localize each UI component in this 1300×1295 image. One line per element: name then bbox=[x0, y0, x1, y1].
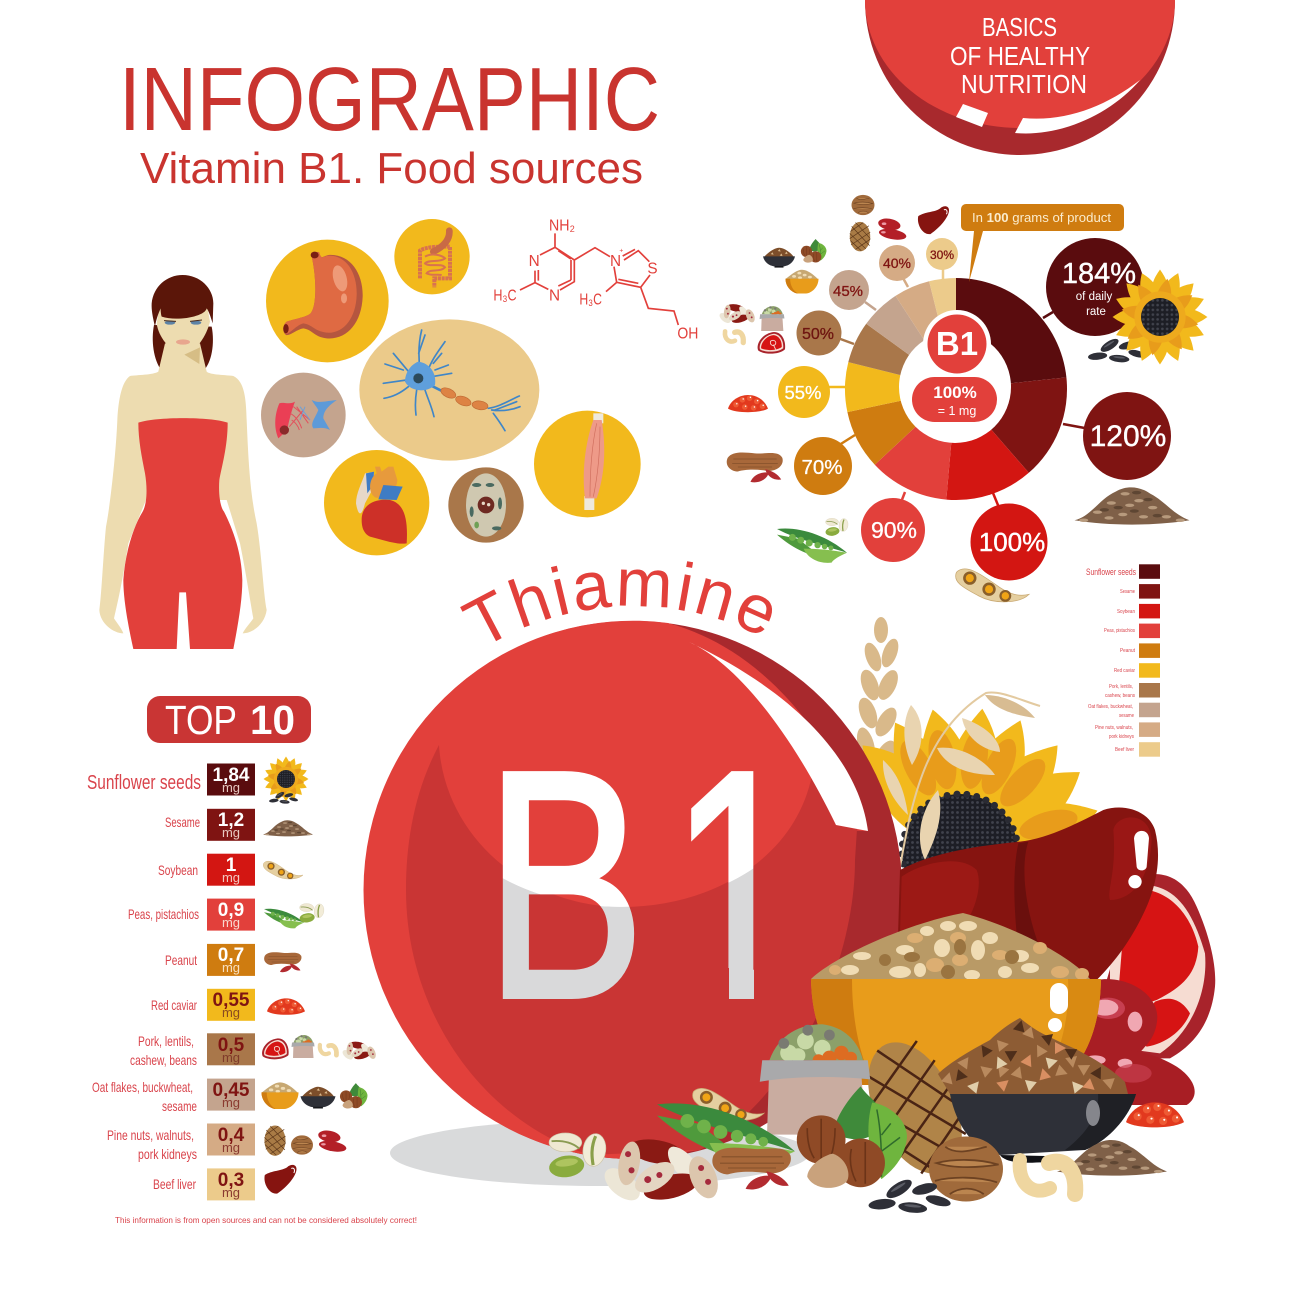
top 10 row: soybean bbox=[158, 854, 303, 886]
top 10 row: red caviar bbox=[151, 989, 305, 1021]
top 10 row: peas, pistachios bbox=[128, 899, 325, 931]
pie bubble: 70%: 70% bbox=[801, 456, 843, 479]
pie bubble: 90% bbox=[861, 498, 925, 562]
big food: kidneys bbox=[1083, 979, 1195, 1105]
legend: Pork, lentils, bbox=[1109, 684, 1133, 690]
top 10 row: pine nuts, walnuts, pork kidneys: mg bbox=[222, 1140, 240, 1155]
icon: pine cone bbox=[850, 222, 870, 251]
big food: liver bbox=[897, 807, 1158, 980]
chemical structure: NH₂ bbox=[549, 218, 575, 235]
legend: sesame bbox=[1119, 713, 1134, 719]
heading: thiamine: Thiamine bbox=[460, 561, 772, 642]
pie bubble: 55%: 55% bbox=[784, 382, 822, 403]
top 10 badge: TOP bbox=[165, 697, 237, 743]
top 10 row: peas, pistachios: Peas, pistachios bbox=[128, 906, 199, 922]
pie bubble: 40%: 40% bbox=[883, 255, 911, 271]
icon: neuron bbox=[359, 319, 539, 461]
pie bubble: 184%: of daily bbox=[1076, 291, 1112, 303]
chemical structure: H₃C bbox=[493, 288, 517, 305]
top 10 row: sesame: Sesame bbox=[165, 814, 200, 830]
top 10 row: peanut: Peanut bbox=[165, 952, 197, 968]
chart: thiamine donut bbox=[828, 268, 1090, 510]
pie bubble: 120%: 120% bbox=[1090, 420, 1166, 453]
icon: kidney bbox=[877, 217, 907, 242]
disclaimer: This information is from open sources and can not be considered absolutely correct! bbox=[115, 1215, 417, 1225]
chemical structure: H₃C bbox=[579, 292, 602, 309]
pie bubble: 50% bbox=[796, 310, 842, 356]
icon: hazelnut bbox=[801, 239, 826, 263]
big food: walnut bbox=[929, 1136, 1003, 1202]
pie bubble: 100%: 100% bbox=[979, 527, 1045, 557]
pie bubble: 184%: rate bbox=[1086, 306, 1106, 318]
icon: beans bbox=[718, 303, 756, 325]
top 10 row: pork, lentils, cashew, beans: mg bbox=[222, 1050, 240, 1065]
badge: basics of healthy nutrition: BASICS bbox=[982, 12, 1057, 42]
chemical structure: N bbox=[529, 253, 540, 270]
chemical structure: + bbox=[619, 248, 623, 255]
chemical structure: N bbox=[549, 288, 560, 305]
top 10 row: sesame bbox=[165, 809, 313, 841]
icon: liver bbox=[918, 206, 949, 234]
icon: oat bowl bbox=[786, 270, 818, 294]
chemical structure: N bbox=[610, 253, 621, 270]
top 10 badge: 10 bbox=[250, 697, 295, 743]
big food: sesame pile bbox=[1057, 1140, 1167, 1176]
top 10 row: beef liver: 0,3 bbox=[218, 1170, 244, 1191]
big food: sunflower bbox=[844, 704, 1105, 910]
top 10 row: pine nuts, walnuts, pork kidneys: Pine nuts, walnuts, bbox=[107, 1127, 194, 1143]
icon: sesame pile bbox=[1074, 487, 1190, 525]
legend: Beef liver bbox=[1115, 747, 1134, 753]
top 10 row: oat flakes, buckwheat, sesame: Oat flakes, buckwheat, bbox=[92, 1079, 193, 1095]
top 10 row: peanut: mg bbox=[222, 960, 240, 975]
top 10 row: soybean: 1 bbox=[226, 855, 237, 876]
icon: sunflower bbox=[1112, 270, 1208, 364]
icon: cashew bbox=[725, 331, 743, 343]
big food: sunflower seeds bbox=[868, 1176, 952, 1214]
badge: basics of healthy nutrition bbox=[865, 0, 1175, 155]
pie bubble: 45% bbox=[829, 270, 869, 310]
pie bubble: 120% bbox=[1083, 392, 1171, 480]
big food: pistachio bbox=[548, 1132, 608, 1179]
icon: pistachio bbox=[825, 518, 849, 537]
top 10 row: beef liver bbox=[153, 1165, 296, 1200]
icon: stomach bbox=[266, 240, 389, 362]
icon: soybean pod bbox=[956, 569, 1029, 602]
legend bbox=[1086, 564, 1160, 757]
woman figure bbox=[99, 275, 267, 649]
top 10 row: pine nuts, walnuts, pork kidneys: 0,4 bbox=[218, 1125, 245, 1146]
pie bubble: 100% bbox=[970, 504, 1048, 580]
icon: sunflower seeds bbox=[1088, 336, 1147, 363]
icon: capillaries bbox=[261, 373, 346, 457]
top 10 row: pine nuts, walnuts, pork kidneys: pork kidneys bbox=[138, 1146, 197, 1162]
top 10 row: oat flakes, buckwheat, sesame: mg bbox=[222, 1095, 240, 1110]
legend: pork kidneys bbox=[1109, 734, 1134, 740]
badge: basics of healthy nutrition: OF HEALTHY bbox=[950, 41, 1090, 71]
top 10 row: sunflower seeds: Sunflower seeds bbox=[87, 772, 201, 794]
shadow under capsule bbox=[390, 1120, 810, 1186]
top 10 row: sesame: 1,2 bbox=[218, 810, 244, 831]
top 10 row: beef liver: mg bbox=[222, 1185, 240, 1200]
callout: in 100 grams of product bbox=[961, 204, 1124, 282]
big food: soybean pod bbox=[693, 1088, 764, 1120]
pie bubble: 40% bbox=[879, 245, 915, 281]
top 10 row: red caviar: Red caviar bbox=[151, 997, 197, 1013]
icon: intestine bbox=[394, 219, 470, 294]
icon: walnut bbox=[852, 195, 874, 215]
legend: Sesame bbox=[1120, 589, 1135, 595]
top 10 row: pork, lentils, cashew, beans: cashew, beans bbox=[130, 1052, 197, 1068]
big food: caviar bbox=[1126, 1102, 1184, 1127]
top 10 row: pine nuts, walnuts, pork kidneys bbox=[107, 1124, 347, 1162]
center label: B1: B1 bbox=[936, 325, 978, 362]
top 10 row: sunflower seeds: mg bbox=[222, 780, 240, 795]
big food: beans bbox=[599, 1136, 724, 1207]
pie bubble: 45%: 45% bbox=[833, 283, 863, 300]
big food: buckwheat bowl bbox=[938, 1018, 1136, 1163]
label: B1: B bbox=[485, 704, 645, 1066]
heading: thiamine bbox=[460, 561, 772, 642]
icon: peas bbox=[777, 528, 847, 563]
chemical structure bbox=[493, 218, 698, 342]
legend: Peanut bbox=[1120, 648, 1136, 654]
top 10 row: sunflower seeds bbox=[87, 756, 308, 804]
icon: peanut bbox=[727, 452, 783, 482]
big food: peas bbox=[657, 1103, 795, 1171]
center label: 100% = 1 mg bbox=[912, 377, 997, 422]
pie bubble: 50%: 50% bbox=[802, 326, 834, 343]
center label: B1 bbox=[928, 314, 986, 374]
label: B1 bbox=[502, 771, 754, 999]
top 10 row: oat flakes, buckwheat, sesame: sesame bbox=[162, 1098, 197, 1114]
icon: red caviar bbox=[728, 395, 768, 412]
top 10 row: soybean: Soybean bbox=[158, 862, 198, 878]
top 10 row: peanut bbox=[165, 944, 301, 976]
legend: Peas, pistachios bbox=[1104, 628, 1135, 634]
vitamin capsule bbox=[364, 621, 902, 1159]
icon: cell bbox=[448, 467, 524, 543]
top 10 row: red caviar: mg bbox=[222, 1005, 240, 1020]
pie bubble: 184% bbox=[1046, 238, 1144, 336]
center label: 100% = 1 mg: 100% bbox=[933, 383, 977, 402]
top 10 row: sunflower seeds: 1,84 bbox=[213, 765, 250, 786]
callout: in 100 grams of product: In 100 grams of product bbox=[972, 210, 1111, 225]
legend: Oat flakes, buckwheat, bbox=[1088, 704, 1133, 710]
big food: cashew bbox=[1020, 1160, 1075, 1194]
top 10 row: peanut: 0,7 bbox=[218, 945, 244, 966]
legend: Sunflower seeds bbox=[1086, 567, 1136, 577]
top 10 row: beef liver: Beef liver bbox=[153, 1176, 196, 1192]
organ icons bbox=[261, 218, 698, 555]
icon: heart bbox=[324, 450, 429, 555]
top 10 row: oat flakes, buckwheat, sesame bbox=[92, 1079, 368, 1114]
top 10 row: red caviar: 0,55 bbox=[213, 990, 250, 1011]
big food: pine cone bbox=[849, 1028, 981, 1188]
big food: oat sprig bbox=[883, 692, 1040, 867]
top 10 row: sesame: mg bbox=[222, 825, 240, 840]
icon: muscle bbox=[534, 411, 641, 517]
big food: wheat ear bbox=[854, 617, 902, 773]
top 10 badge bbox=[147, 696, 311, 743]
big food: pork bbox=[1083, 874, 1215, 1058]
pie bubble: 184%: 184% bbox=[1062, 258, 1136, 290]
pie bubble: 70% bbox=[794, 437, 852, 495]
chemical structure: S bbox=[647, 260, 658, 277]
big food: lentil sack bbox=[760, 1024, 870, 1135]
top 10 row: pork, lentils, cashew, beans: 0,5 bbox=[218, 1035, 245, 1056]
center label: 100% = 1 mg: = 1 mg bbox=[938, 404, 976, 418]
top 10 row: peas, pistachios: 0,9 bbox=[218, 900, 244, 921]
title: INFOGRAPHIC bbox=[119, 50, 660, 150]
chemical structure: OH bbox=[677, 325, 698, 342]
top 10 row: oat flakes, buckwheat, sesame: 0,45 bbox=[213, 1080, 250, 1101]
label: B1: 1 bbox=[670, 704, 803, 1066]
legend: Pine nuts, walnuts, bbox=[1095, 725, 1133, 731]
big food: oat bowl bbox=[811, 913, 1101, 1085]
top 10 row: soybean: mg bbox=[222, 870, 240, 885]
top 10 row: pork, lentils, cashew, beans: Pork, lentils, bbox=[138, 1033, 194, 1049]
subtitle: Vitamin B1. Food sources bbox=[140, 144, 643, 193]
badge: basics of healthy nutrition: NUTRITION bbox=[961, 69, 1087, 99]
pie bubble: 90%: 90% bbox=[871, 517, 917, 543]
pie bubble: 30%: 30% bbox=[930, 248, 954, 262]
icon: lentil sack bbox=[760, 306, 784, 331]
top 10 row: pork, lentils, cashew, beans bbox=[130, 1033, 377, 1068]
legend: Soybean bbox=[1117, 609, 1135, 615]
top 10 row: peas, pistachios: mg bbox=[222, 915, 240, 930]
legend: cashew, beans bbox=[1105, 693, 1135, 699]
pie bubble: 55% bbox=[778, 366, 830, 418]
legend: Red caviar bbox=[1114, 668, 1135, 674]
big food: hazelnuts bbox=[797, 1086, 907, 1188]
big food: peanut bbox=[712, 1148, 791, 1190]
icon: pork bbox=[758, 332, 785, 354]
pie bubble: 30% bbox=[926, 238, 958, 270]
icon: buckwheat bowl bbox=[763, 248, 795, 268]
